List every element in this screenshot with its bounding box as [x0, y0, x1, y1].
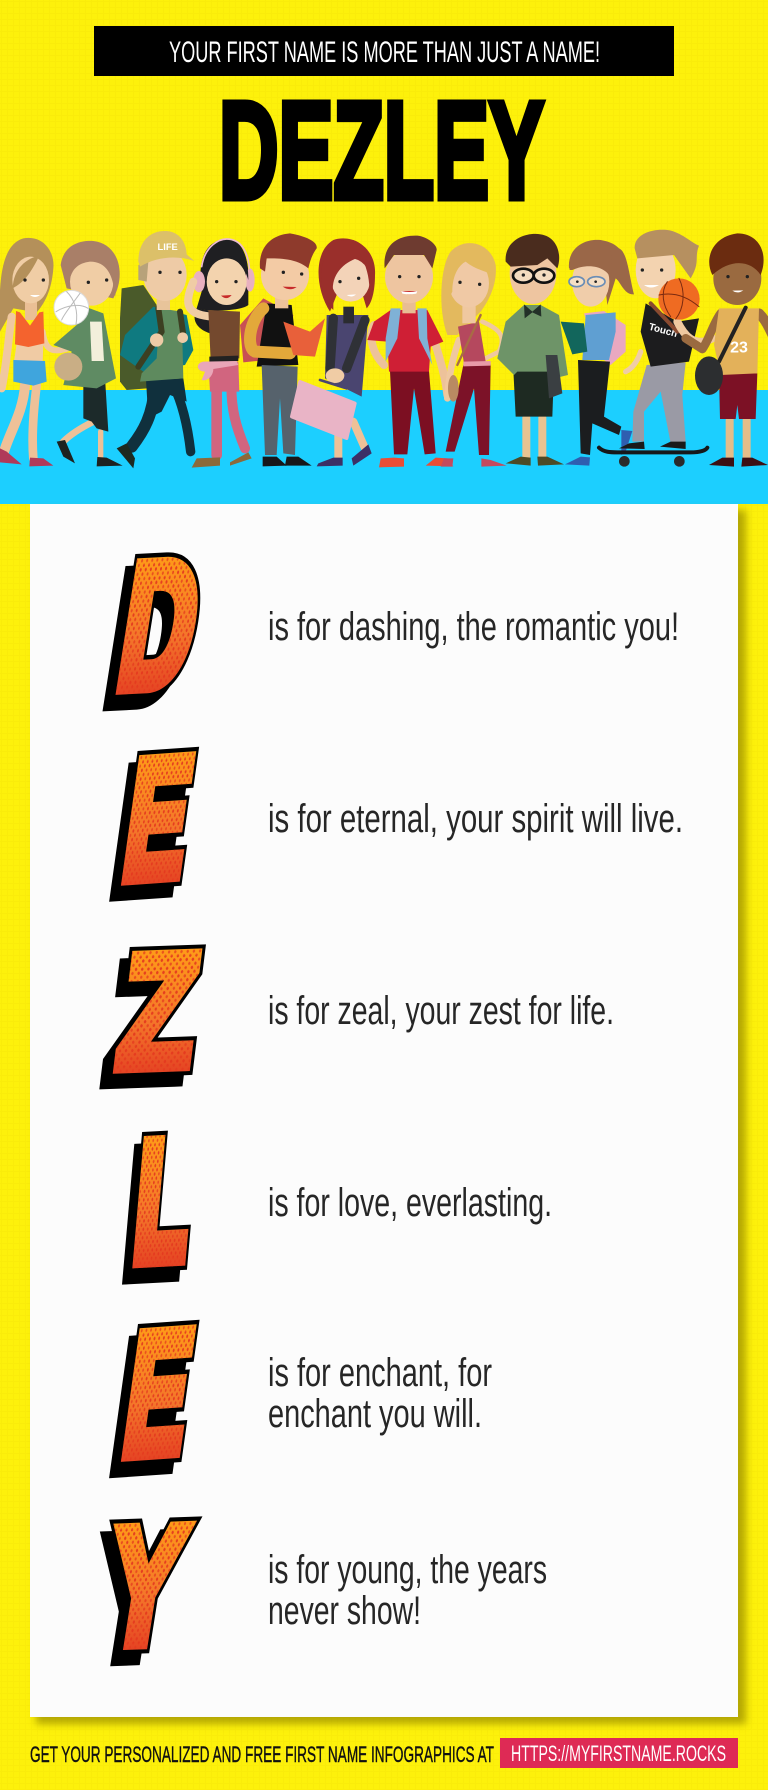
- comic letter L: L: [129, 1107, 197, 1296]
- comic letter D: D: [98, 535, 202, 738]
- comic letter E: E: [105, 733, 193, 928]
- comic letter D: D: [108, 523, 212, 726]
- comic letter Z: Z: [111, 922, 207, 1102]
- comic letter L: L: [129, 1107, 197, 1296]
- row text: is for enchant, for: [268, 1351, 492, 1395]
- person 9: boy with glasses and green sweater: [497, 234, 568, 466]
- comic letter L: L: [129, 1107, 197, 1296]
- comic letter D: D: [108, 523, 212, 726]
- second letter E row: [105, 1293, 492, 1504]
- letter Y row: [85, 1491, 547, 1691]
- person 6: red-haired girl with pink case: [292, 238, 375, 466]
- person 10: girl with ponytail and tablet: [561, 240, 634, 466]
- illustration: group of twelve students, left half: [0, 231, 375, 468]
- person 12: boy in basketball jersey: 23: [730, 340, 748, 357]
- comic letter E: E: [105, 1305, 194, 1504]
- person 4: girl with pink headphones: [188, 239, 255, 468]
- person 3: hiker with backpack and cap: LIFE: [158, 242, 178, 252]
- letter Z row: [101, 922, 614, 1113]
- row text: [268, 1351, 492, 1436]
- title: DEZLEY: [219, 74, 544, 228]
- row text: [268, 1548, 547, 1633]
- blue floor band: [0, 390, 768, 504]
- person 2: girl with volleyball: [53, 241, 123, 466]
- row text: is for young, the years: [268, 1548, 547, 1592]
- letter L row: [121, 1107, 552, 1308]
- person 8: blonde girl: [441, 243, 507, 467]
- comic letter D: D: [108, 523, 212, 726]
- comic letter E: E: [114, 1293, 203, 1492]
- person 11: skater with basketball: [599, 230, 712, 467]
- footer: [30, 1738, 738, 1768]
- comic letter E: E: [114, 722, 202, 916]
- illustration: group of twelve students, right half: [367, 230, 768, 467]
- white letters panel: [30, 504, 738, 1717]
- comic letter E: E: [114, 722, 202, 916]
- person 1: girl in orange top: [0, 238, 77, 466]
- person 5: boy reading orange book: [240, 233, 325, 466]
- letter E row: [105, 722, 683, 928]
- row text: never show!: [268, 1589, 421, 1633]
- comic letter Z: Z: [111, 922, 207, 1102]
- comic letter Y: Y: [94, 1491, 196, 1680]
- row text: enchant you will.: [268, 1392, 482, 1436]
- comic letter E: E: [114, 722, 202, 916]
- comic letter Y: Y: [94, 1491, 196, 1680]
- comic letter Y: Y: [85, 1503, 186, 1691]
- comic letter Y: Y: [94, 1491, 196, 1680]
- comic letter E: E: [114, 1293, 203, 1492]
- row text: is for zeal, your zest for life.: [268, 989, 614, 1033]
- person 11: skater with basketball: Touch: [647, 322, 679, 340]
- comic letter E: E: [114, 1293, 203, 1492]
- letter D row: [98, 523, 679, 738]
- person 7: boy in red t-shirt: [367, 236, 453, 467]
- comic letter L: L: [121, 1119, 189, 1308]
- footer call to action: GET YOUR PERSONALIZED AND FREE FIRST NAME INFOGRAPHICS AT: [30, 1742, 494, 1767]
- panel shadow: [36, 510, 746, 1724]
- header banner: [94, 26, 674, 76]
- row text: is for love, everlasting.: [268, 1181, 552, 1225]
- comic letter Z: Z: [111, 922, 207, 1102]
- comic letter Z: Z: [101, 933, 197, 1113]
- person 12: boy in basketball jersey: [686, 233, 768, 467]
- person 3: hiker with backpack and cap: [117, 231, 194, 468]
